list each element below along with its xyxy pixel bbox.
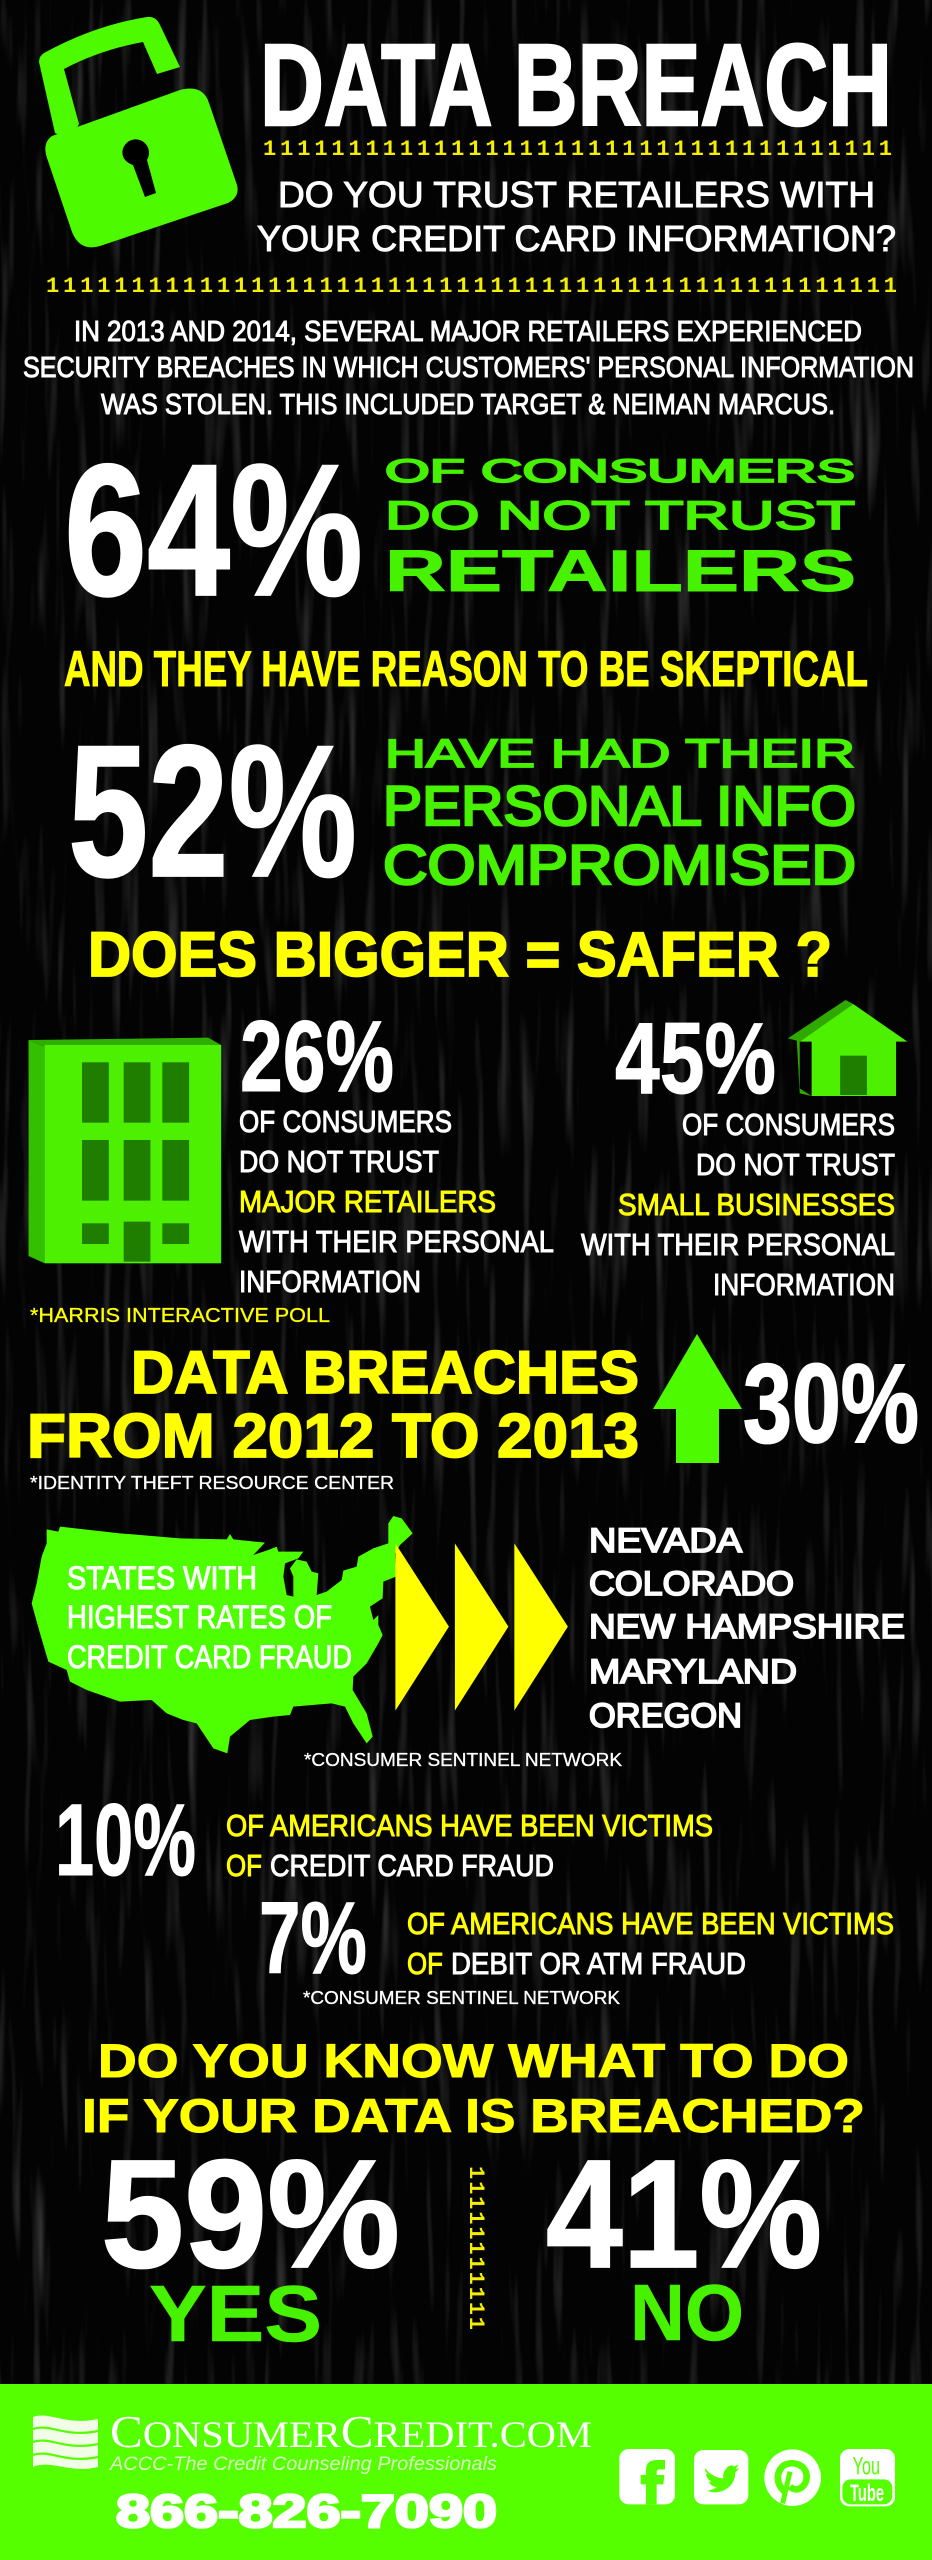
stat: 59 percent yes: 59% bbox=[101, 2128, 400, 2300]
map caption: HIGHEST RATES OF bbox=[67, 1599, 332, 1635]
heading: DO YOU KNOW WHAT TO DO bbox=[98, 2034, 849, 2087]
icon: house bbox=[788, 1000, 907, 1096]
intro paragraph: IN 2013 AND 2014, SEVERAL MAJOR RETAILERS EXPERIENCED bbox=[74, 316, 862, 348]
source note: *CONSUMER SENTINEL NETWORK bbox=[304, 1750, 622, 1770]
intro paragraph: WAS STOLEN. THIS INCLUDED TARGET & NEIMAN MARCUS. bbox=[101, 389, 835, 421]
icon: twitter bbox=[694, 2450, 748, 2504]
panel: header bbox=[23, 17, 914, 421]
binary divider top: 1111111111111111111111111111111111111 bbox=[263, 137, 892, 162]
stat: 41 percent no bbox=[546, 2128, 822, 2357]
stat label: HAVE HAD THEIR bbox=[385, 732, 855, 776]
icon: open padlock bbox=[39, 17, 238, 247]
source note: *CONSUMER SENTINEL NETWORK bbox=[303, 1988, 620, 2008]
stat text: WITH THEIR PERSONAL bbox=[239, 1224, 554, 1259]
stat number: 45% bbox=[615, 1003, 776, 1115]
stat text bbox=[407, 1906, 894, 1981]
stat label: RETAILERS bbox=[385, 539, 856, 604]
panel: small businesses bbox=[581, 1000, 907, 1302]
heading bbox=[82, 2034, 865, 2142]
stat text: DEBIT OR ATM FRAUD bbox=[451, 1946, 746, 1981]
stat text: INFORMATION bbox=[713, 1267, 895, 1302]
panel: states with highest fraud bbox=[32, 1516, 905, 1770]
icon: youtube: You bbox=[853, 2453, 880, 2480]
state list: MARYLAND bbox=[589, 1653, 797, 1691]
phone number: 866-826-7090 bbox=[116, 2485, 497, 2537]
logo wordmark: CONSUMER CREDIT.COM bbox=[110, 2407, 592, 2457]
map caption bbox=[67, 1560, 352, 1675]
stat text: OF CONSUMERS bbox=[682, 1107, 895, 1142]
subtitle: DO YOU TRUST RETAILERS WITH bbox=[278, 174, 875, 215]
panel: footer bbox=[0, 2384, 932, 2560]
stat label: COMPROMISED bbox=[383, 833, 856, 896]
stat text: OF AMERICANS HAVE BEEN VICTIMS bbox=[226, 1808, 713, 1843]
arrow: up bbox=[653, 1334, 742, 1463]
heading: bigger safer: DOES BIGGER = SAFER ? bbox=[88, 920, 832, 990]
state list: COLORADO bbox=[589, 1565, 794, 1603]
stat number: 64% bbox=[64, 425, 363, 635]
panel: major retailers bbox=[29, 1001, 554, 1327]
panel: data breach growth bbox=[27, 1334, 919, 1493]
icon: youtube: Tube bbox=[850, 2480, 884, 2507]
stat text bbox=[226, 1808, 713, 1883]
stat label bbox=[383, 732, 856, 896]
panel: 64 percent stat bbox=[64, 425, 856, 635]
subtitle: YOUR CREDIT CARD INFORMATION? bbox=[257, 218, 896, 259]
icon: youtube bbox=[840, 2449, 895, 2507]
stat text: OF bbox=[407, 1946, 443, 1981]
intro paragraph bbox=[23, 316, 914, 421]
map: United States bbox=[32, 1516, 413, 1753]
source note: *IDENTITY THEFT RESOURCE CENTER bbox=[30, 1473, 394, 1493]
panel: do you know bbox=[82, 2034, 865, 2358]
stat text bbox=[239, 1104, 554, 1299]
state list: NEW HAMPSHIRE bbox=[589, 1608, 905, 1646]
stat: 41 percent no: NO bbox=[630, 2268, 744, 2357]
stat number: 26% bbox=[240, 1001, 394, 1113]
icon: facebook bbox=[619, 2449, 675, 2504]
arrows: three chevrons bbox=[395, 1543, 568, 1711]
stat text: OF bbox=[226, 1848, 262, 1883]
source note: *HARRIS INTERACTIVE POLL bbox=[30, 1305, 330, 1327]
state list bbox=[589, 1522, 905, 1735]
state list: NEVADA bbox=[589, 1522, 742, 1560]
subtitle bbox=[257, 174, 896, 259]
stat text bbox=[581, 1107, 895, 1302]
heading: FROM 2012 TO 2013 bbox=[27, 1402, 639, 1471]
tagline: ACCC-The Credit Counseling Professionals bbox=[109, 2454, 498, 2475]
stat text: DO NOT TRUST bbox=[239, 1144, 439, 1179]
stat text: SMALL BUSINESSES bbox=[618, 1187, 895, 1222]
binary divider bottom: 11111111111111111111111111111111111111111111111111 bbox=[46, 274, 897, 299]
stat text: MAJOR RETAILERS bbox=[239, 1184, 496, 1219]
icon: pinterest bbox=[764, 2449, 821, 2506]
state list: OREGON bbox=[589, 1697, 742, 1735]
map caption: STATES WITH bbox=[67, 1560, 257, 1596]
stat text: WITH THEIR PERSONAL bbox=[581, 1227, 895, 1262]
stat text: DO NOT TRUST bbox=[696, 1147, 895, 1182]
icon: logo waves bbox=[33, 2416, 98, 2469]
heading: IF YOUR DATA IS BREACHED? bbox=[82, 2089, 865, 2142]
stat text: OF CONSUMERS bbox=[239, 1104, 452, 1139]
stat label: OF CONSUMERS bbox=[385, 453, 855, 489]
icon: office building bbox=[29, 1038, 221, 1263]
stat: 59 percent yes: YES bbox=[149, 2269, 322, 2358]
stat number: 52% bbox=[68, 706, 357, 916]
heading bbox=[27, 1339, 639, 1471]
map caption: CREDIT CARD FRAUD bbox=[67, 1639, 352, 1675]
stat label: DO NOT TRUST bbox=[385, 494, 855, 538]
heading: DATA BREACHES bbox=[131, 1339, 639, 1406]
panel: 52 percent stat bbox=[68, 706, 856, 916]
binary divider vertical: 11111111111 bbox=[463, 2166, 488, 2330]
stat number: 10 percent: 10% bbox=[55, 1783, 196, 1897]
stat label bbox=[385, 453, 856, 604]
stat: 41 percent no: 41% bbox=[546, 2128, 822, 2300]
stat label: PERSONAL INFO bbox=[383, 774, 856, 837]
social icons bbox=[619, 2449, 895, 2507]
stat number: 7 percent: 7% bbox=[259, 1881, 367, 1995]
stat text: INFORMATION bbox=[239, 1264, 421, 1299]
panel: fraud victims bbox=[55, 1783, 894, 2008]
stat text: CREDIT CARD FRAUD bbox=[270, 1848, 554, 1883]
